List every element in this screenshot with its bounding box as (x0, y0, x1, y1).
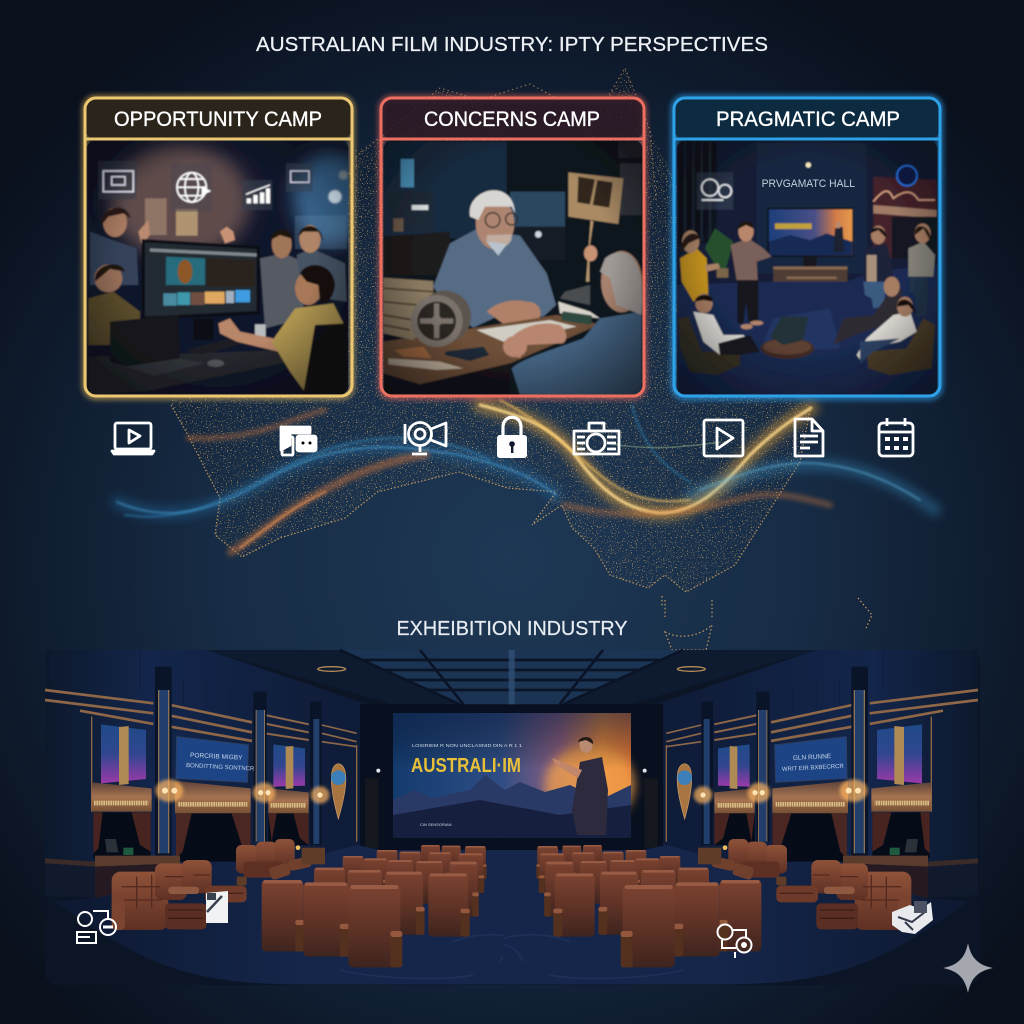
icon row (112, 417, 913, 458)
banner text left: PORCRIB MIGBY (190, 752, 243, 762)
icon: money (574, 423, 619, 454)
banner text right (782, 753, 845, 773)
icon: handshake (892, 901, 933, 934)
banner text right: WRIT EIR BXBECRCR (782, 764, 845, 773)
heading: exhibition industry: EXHEIBITION INDUSTRY (396, 618, 628, 640)
panel frame (85, 98, 352, 396)
panel: pragmatic camp (674, 98, 940, 397)
flowing light ribbons (117, 400, 935, 552)
map: Australia particle outline (150, 60, 880, 660)
heading: PRAGMATIC CAMP (716, 108, 900, 131)
icon: calendar (879, 418, 913, 456)
cinema screen: LOSIRIEM R NON UNCLASNID DIN A R 1 1 (412, 743, 523, 748)
theatre left half (45, 650, 520, 984)
panel: concerns camp (381, 98, 644, 397)
icon: document (795, 419, 823, 456)
panel: opportunity camp (85, 98, 373, 397)
cinema screen: AUSTRALI·IM (411, 755, 521, 777)
title: AUSTRALIAN FILM INDUSTRY: IPTY PERSPECTIVES (256, 34, 768, 56)
scene: two men at a desk (383, 140, 643, 397)
sparkle mark (943, 943, 993, 993)
icon: coins and gears (718, 924, 752, 958)
banner text left: BONDITTING SONTNCR (186, 763, 255, 773)
cinema screen: CIN SENSORIAN (420, 822, 452, 827)
icon: people and gear (77, 911, 116, 943)
banner text left (186, 752, 255, 773)
icon: play square (704, 420, 743, 456)
panel: theatre (45, 650, 980, 985)
heading: CONCERNS CAMP (424, 108, 600, 131)
icon: document card (206, 891, 228, 923)
icon: camera and ticket (281, 427, 316, 455)
banner text right: GLN RUNNE (793, 753, 832, 762)
figure on screen (552, 737, 608, 835)
cinema screen (393, 713, 635, 838)
panel frame (674, 98, 940, 396)
scene: team at monitor (87, 140, 373, 397)
scene: pragmatic hall (677, 140, 940, 397)
icon: padlock (497, 417, 527, 458)
icon: projector camera (405, 422, 446, 454)
icon: laptop play (112, 423, 154, 454)
heading: OPPORTUNITY CAMP (114, 108, 322, 131)
theatre right half (503, 650, 978, 984)
panel frame (381, 98, 644, 396)
hall label: PRVGAMATC HALL (762, 178, 855, 190)
